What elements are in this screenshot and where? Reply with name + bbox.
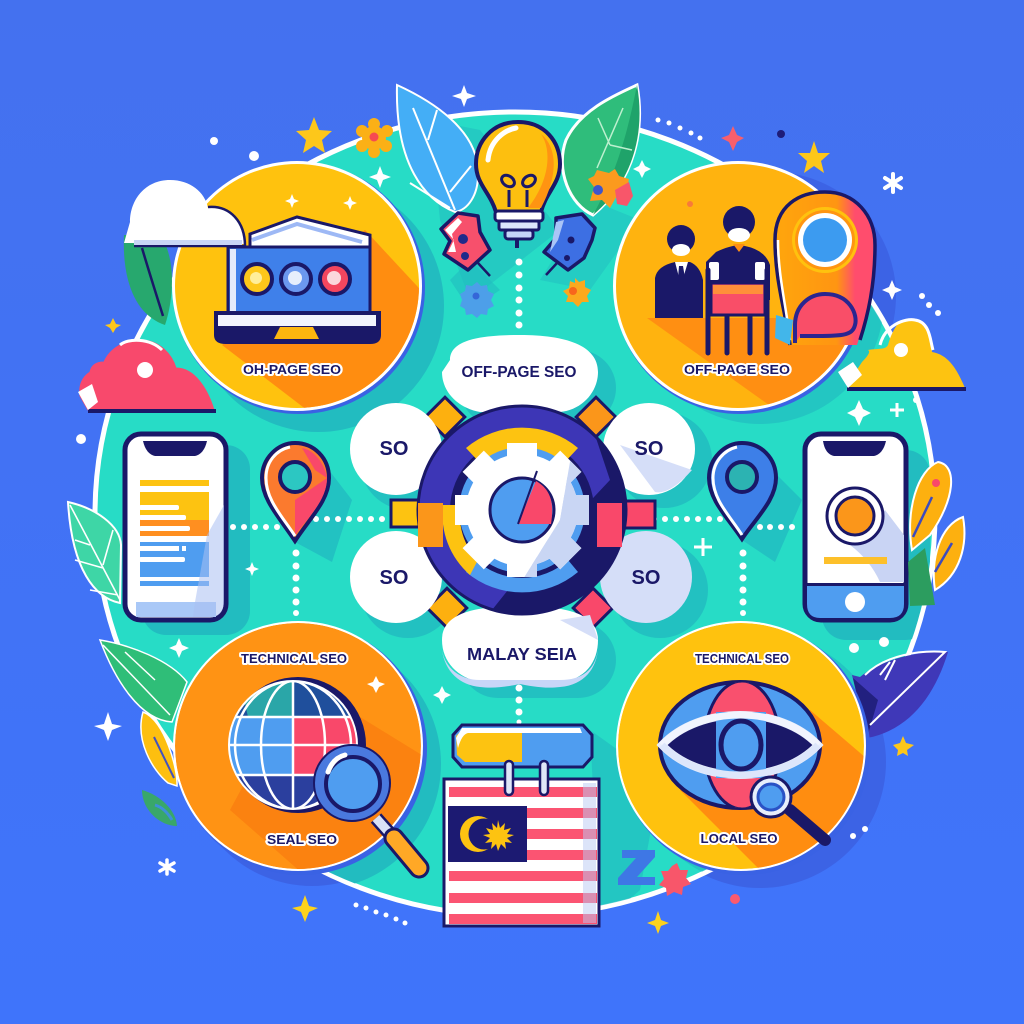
- leaf: green lower left: [100, 640, 187, 722]
- leaf: purple right: [852, 652, 948, 738]
- icon: white sparkle: [369, 166, 391, 188]
- icon: small magnifier: [751, 777, 825, 840]
- icon: red pushpin: [441, 213, 490, 276]
- panel: bottom-right technical SEO circle: [616, 621, 880, 880]
- icon: magnifier: [314, 745, 419, 868]
- icon: left map pin: [262, 443, 329, 541]
- gauge dial: [490, 471, 554, 542]
- icon: right map pin: [709, 443, 776, 539]
- panel: bottom-left technical SEO circle: [173, 621, 430, 880]
- white gear: [455, 443, 589, 577]
- background soft shadows: [188, 172, 896, 888]
- connector dots: [169, 160, 904, 724]
- leaf: blue top left: [397, 85, 478, 212]
- icon: blue Z: [618, 850, 655, 885]
- label: local SEO: LOCAL SEO: [700, 832, 778, 846]
- label: on-page SEO: OH-PAGE SEO: [243, 363, 341, 377]
- bubbles: [350, 335, 695, 688]
- panel: top-left on-page SEO circle: [172, 161, 430, 420]
- icon: Malaysian flag calendar: [444, 725, 599, 926]
- panel: top-right off-page SEO circle: [613, 161, 880, 420]
- icon: blue pushpin: [544, 214, 595, 275]
- small stars and dots on background: [76, 85, 941, 934]
- icon: red cloud: [78, 340, 216, 413]
- label: top right SO: SO: [635, 438, 663, 460]
- icon: red flower bottom: [659, 863, 691, 896]
- label: technical SEO right: TECHNICAL SEO: [695, 652, 789, 666]
- icon: left smartphone: [125, 434, 226, 620]
- icon: yellow flower top left: [356, 118, 393, 158]
- leaf: green top right: [562, 85, 640, 215]
- icon: globe: [229, 677, 366, 813]
- icon: yellow cloud: [838, 320, 966, 391]
- label: off-page SEO: OFF-PAGE SEO: [684, 363, 790, 377]
- leaf: teal left: [68, 502, 121, 603]
- label: bottom left SO: SO: [380, 567, 408, 589]
- leaf: yellow lower left: [141, 712, 177, 786]
- icon: two people and chair: [655, 206, 770, 353]
- icon: laptop: [214, 217, 381, 344]
- label: off-page bubble: OFF-PAGE SEO: [462, 364, 576, 381]
- gear ring: [418, 406, 626, 614]
- teal central disc: [95, 112, 935, 925]
- icon: white cloud: [124, 180, 245, 246]
- label: Malay bubble: MALAY SEIA: [467, 644, 577, 664]
- label: top left SO: SO: [380, 438, 408, 460]
- icon: light bulb: [476, 122, 560, 248]
- leaf: small green bottom left: [142, 790, 177, 826]
- label: bottom right SO: SO: [632, 567, 660, 589]
- icon: location tag: [775, 192, 875, 345]
- icon: eye globe: [660, 681, 820, 809]
- label: technical SEO: TECHNICAL SEO: [241, 652, 347, 666]
- leaf: green left of cloud: [124, 235, 172, 325]
- icon: right yellow leaves: [908, 462, 964, 606]
- gear tabs: [391, 397, 655, 628]
- label: seal SEO: SEAL SEO: [267, 833, 337, 847]
- icon: small flowers: [460, 169, 633, 318]
- icon: right smartphone: [805, 434, 906, 620]
- panel: central hub: [350, 335, 695, 688]
